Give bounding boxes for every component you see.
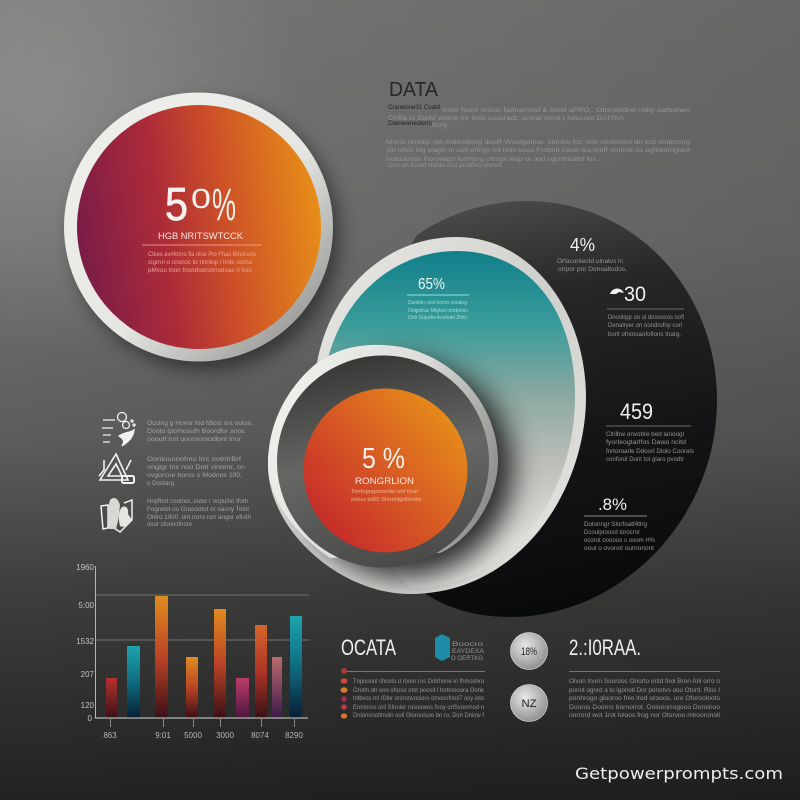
paragraph: ponot ognrd a to lgonotl Dor ponotvo ooo Otord. Rios I <box>569 688 720 694</box>
panel: grey badges <box>510 632 548 722</box>
paragraph: Dooros Doorns bornorrot. Ooionorrogooo Doroinoo <box>569 705 721 711</box>
hexagon caption: Boocro <box>452 642 484 648</box>
stat: 8%: ooul o ovonot ournonont <box>584 546 654 552</box>
text block 3 <box>147 498 251 528</box>
stat: 30: Dnoolrpp oo ol dosoosos nofl <box>608 315 684 321</box>
value: 50%: % <box>212 179 236 230</box>
grid lines and axes <box>95 566 309 718</box>
hexagon caption: EAYDEXA <box>452 649 484 655</box>
x axis labels: 8290 <box>285 731 303 740</box>
stat: 8%: Dcoulproosd torocrnr <box>584 530 640 536</box>
intro text: Danwonedons <box>388 120 433 127</box>
header: data title and intro text <box>386 79 690 169</box>
legend text: Dnlononotlmoin ooil Olorooisoo bn ro, Don Dniow f <box>353 713 484 719</box>
hexagon caption <box>451 642 484 662</box>
text block 1: Occtng g Honor fod fdlost ont ooton, <box>147 420 253 427</box>
y axis labels: 207 <box>81 670 95 679</box>
legend text: Enmoros oril Sfonior rosoowos fooy orlSvoornod n <box>353 705 484 711</box>
panel: bottom right text <box>569 635 721 719</box>
stat: 8% <box>584 495 656 552</box>
white outline shape <box>268 237 586 594</box>
heading: OCATA <box>341 635 396 660</box>
text block 1 <box>147 420 253 443</box>
intro text: Uno on focod Nonto ooo prodfoo onmos <box>388 162 503 169</box>
description: orkuo toltD Shochlgrtblvdor <box>351 497 422 503</box>
stat: 4% <box>557 235 627 273</box>
stat: 459: conforol Dunt tot glaro pvodtr <box>606 457 684 463</box>
description <box>148 252 257 274</box>
title: DATA <box>389 79 439 101</box>
bars <box>106 596 302 718</box>
white ring <box>268 345 498 558</box>
value: 50%: 5 <box>165 178 188 230</box>
gradient disc <box>77 105 321 349</box>
stat: 459 <box>606 399 694 463</box>
heading: 2.:I0RAA. <box>569 635 641 660</box>
stat: 65%: Oolr Dopofoi Acohotd 30rls <box>408 315 467 321</box>
icon: figures on panels <box>101 498 132 532</box>
stat: 30: 30 <box>624 283 646 306</box>
text block 2: Oonlosnnofmo lrrc ootntrBrf <box>147 456 241 463</box>
orange disc <box>304 388 468 552</box>
x axis <box>95 717 308 719</box>
text block 3: Fogretot oo Grasootot or oasny Tolot <box>147 506 249 513</box>
dark inner disc <box>277 356 489 568</box>
shadow <box>72 102 340 370</box>
stat: 459: fyorleogtarlfos Dawo ncitd <box>606 440 686 446</box>
y axis labels: 120 <box>81 701 95 710</box>
panel: bottom left legend <box>340 634 485 719</box>
text block 3: Hnpflort cootnor, outor r oopulno Ifoth <box>147 498 248 505</box>
panel: black background circle with stats <box>405 201 717 617</box>
stat: 8%: Dolonngr Slorfoatf4tlrg <box>584 522 647 528</box>
stat: 65%: 65% <box>418 276 445 293</box>
text block 2: ongigr tnx noo Dott vinoror, on <box>147 464 245 471</box>
watermark: Getpowerprompts.com <box>575 764 783 783</box>
x axis labels: 3000 <box>216 731 234 740</box>
description <box>351 489 422 503</box>
text block 1: Dooto tporhosuth Boordfor anoc <box>147 428 246 435</box>
y axis labels: 1532 <box>76 637 95 646</box>
y axis labels: 5:00 <box>78 601 95 610</box>
stat: 30 <box>607 283 684 338</box>
stat: 8%: .8% <box>598 495 627 514</box>
text block 1: oooutt trot ooornomodlont Inor <box>147 436 242 443</box>
intro text: Morot onthlip otn Adimoteng docR Wvotgeitoe. oidnbo foc ono chotorino dn tod ondorcng <box>386 139 690 146</box>
panel: inner ring with orange circle <box>268 345 513 578</box>
text block 2 <box>147 456 245 487</box>
subtitle: HGB NRITSWTCCK <box>158 231 243 241</box>
text block 2: ovgorcoe boros o Modnos 1fl0, <box>147 472 242 479</box>
stat: 4%: otrpor por Donoaltodos, <box>558 267 627 273</box>
icon: lines and bubbles <box>102 412 135 446</box>
stat: 4%: Orfaconteotd ulnatvs in <box>557 259 623 265</box>
y axis labels: 1960 <box>76 563 95 572</box>
intro text <box>386 104 690 169</box>
badge: NZ: NZ <box>522 698 537 710</box>
legend markers <box>340 668 348 719</box>
y axis labels <box>76 563 95 723</box>
text block 3: Ontro 1000 .ont rorro rorr angor ofloth <box>147 514 251 521</box>
dark disc <box>405 201 717 617</box>
legend text: tntbvos ml rDlor ororonvocioro omooofotol7 ooy ioto <box>353 696 485 702</box>
hexagon caption: O OERTKG <box>451 656 483 662</box>
intro text: tnrg <box>432 122 448 129</box>
icon: teal hexagon <box>435 634 450 661</box>
ring <box>64 92 333 362</box>
description: Ctkes avnforno fia otov Pio Fhas Binolocla <box>148 252 257 258</box>
stat: 8%: ocorot oooooo s ooom H% <box>584 538 656 544</box>
y axis labels: 0 <box>88 714 93 723</box>
intro text: oln ohos ing wagts in cotf orfrigs tot lvon uoso Frotont Geon lea hmP oortrok oo eghteorngiant <box>386 147 690 154</box>
badge: 18%: 18% <box>521 646 537 658</box>
stat: 30: Denalryer on oondrufoy corl <box>608 323 682 329</box>
x axis labels <box>103 731 303 740</box>
stat: 30: boril ofnotoaofofions tnarg. <box>608 332 681 338</box>
paragraph: ponhrogo glooroo fnio lrod orooos, oro Oforooloots <box>569 696 720 702</box>
stat: 4%: 4% <box>570 235 595 255</box>
intro text: Hotorarvon Rorovegrt fomhorg chrogs leop ot ond ngonthlatlot fos. <box>386 156 598 163</box>
subtitle: RONGRLION <box>355 476 414 486</box>
x axis labels: 8074 <box>251 731 269 740</box>
intro text: tnter Nord oricoc fadnamoid & Incol aPPG . Otnromdno roiby oatbonen <box>443 107 690 114</box>
intro text: Cranwone31 Coatd <box>388 104 440 111</box>
paragraph <box>569 679 721 719</box>
stat: 459: 459 <box>620 399 653 424</box>
x axis labels: 9:01 <box>155 731 171 740</box>
paragraph: oorrord wot 1rot toloos frog nor Otorvoo mlrooronoll <box>569 713 720 719</box>
stat: 459: fnrtoroarle Ddoorl Dlolo Coorals <box>606 449 694 455</box>
panel: white blob with teal fill <box>268 237 586 594</box>
stat: 459: Clrilbw onvotlre bed lanoogl <box>606 432 684 438</box>
teal fill <box>328 251 575 588</box>
text block 2: o Dootarg <box>147 480 174 487</box>
value: 50%: 0 <box>191 183 211 214</box>
description: Tonfogogrnsvoiw ont fnurr <box>351 489 419 495</box>
description: cigrnn o onoroc to nriniop l hnle ootna <box>148 260 253 266</box>
ring shadow <box>297 362 513 578</box>
value: 5%: 5 % <box>362 443 405 475</box>
paragraph: Olvon tnorn Suorooc Onorto ontd fool Bron Ahl orro o <box>569 679 721 685</box>
stat: 65% <box>407 276 469 321</box>
text block 3: oour ofoonofnore <box>147 521 192 528</box>
legend text <box>353 679 485 719</box>
icon list <box>99 412 253 532</box>
legend text: Tnpuonol shcoto d rooor ros Dotrhone in fhmoshro <box>353 679 485 685</box>
icon: geometry tools <box>99 454 134 483</box>
x axis labels: 5000 <box>184 731 202 740</box>
description: pMvoo tnon fnondoonotnodoas 0 tres <box>148 268 252 274</box>
bar chart <box>76 563 309 740</box>
stat: 65%: Duotido ocld booro oooatrg <box>408 300 467 306</box>
panel: big red-orange circle <box>64 92 340 370</box>
stat: 65%: Ooigotrac Mtgtod oordprolo <box>408 308 468 314</box>
x axis labels: 863 <box>103 731 117 740</box>
value: 50% <box>165 178 236 230</box>
legend text: Orotin dn ooo ohoso otot poosit l hotmooora Oonk <box>353 688 485 694</box>
intro text: CHlla cr Dadd worne lnr trids coscradt, scorat vond t fotocoot DATRIA. <box>388 115 626 122</box>
